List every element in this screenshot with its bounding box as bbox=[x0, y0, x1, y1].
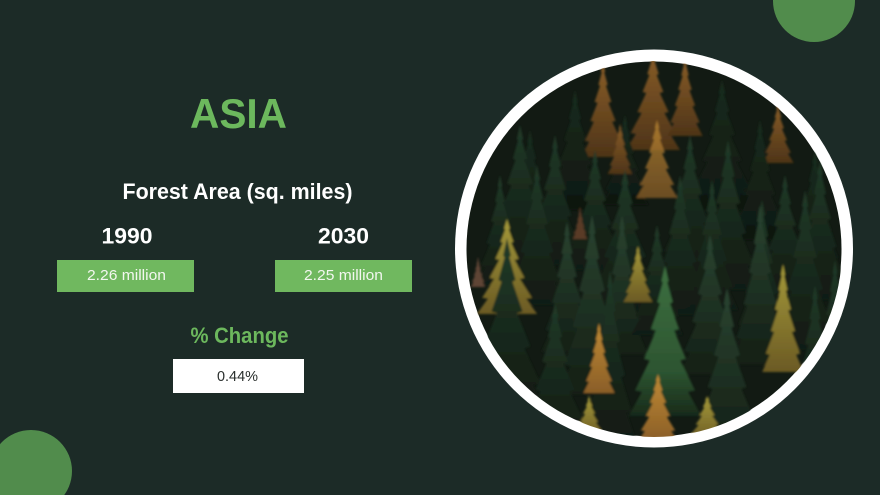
value: 2030: 2.25 million bbox=[304, 267, 383, 284]
bar: 1990 bbox=[57, 260, 194, 292]
yellow centre tree bbox=[623, 246, 653, 302]
dark tree rows bbox=[601, 172, 648, 310]
orange front tree bbox=[583, 323, 615, 393]
middle dark row bbox=[504, 126, 531, 264]
value box bbox=[173, 359, 304, 393]
photo: forest in white ring bbox=[455, 50, 858, 448]
year label: 1990: 1990 bbox=[102, 224, 152, 248]
panel: 1990 value bbox=[57, 224, 194, 292]
foreground dark trees bbox=[486, 238, 540, 398]
bright green tree bbox=[629, 266, 701, 416]
right yellow tree bbox=[762, 264, 804, 372]
decorative circle: bottom left bbox=[0, 430, 72, 495]
title: ASIA bbox=[190, 90, 287, 137]
left yellow tree bbox=[477, 219, 537, 314]
heading: forest area: Forest Area (sq. miles) bbox=[122, 179, 352, 204]
orange mid trees bbox=[636, 120, 678, 198]
value: percent: 0.44% bbox=[217, 369, 258, 385]
orange top trees bbox=[584, 68, 619, 158]
bottom yellow trees bbox=[639, 373, 676, 437]
bar: 2030 bbox=[275, 260, 412, 292]
value: 1990: 2.26 million bbox=[87, 267, 166, 284]
panel: 2030 value bbox=[275, 224, 412, 292]
panel: percent change value bbox=[173, 359, 304, 393]
back row bbox=[562, 92, 590, 209]
decorative circle: top right bbox=[773, 0, 855, 42]
heading: percent change: % Change bbox=[190, 323, 288, 348]
year label: 2030: 2030 bbox=[318, 224, 369, 248]
